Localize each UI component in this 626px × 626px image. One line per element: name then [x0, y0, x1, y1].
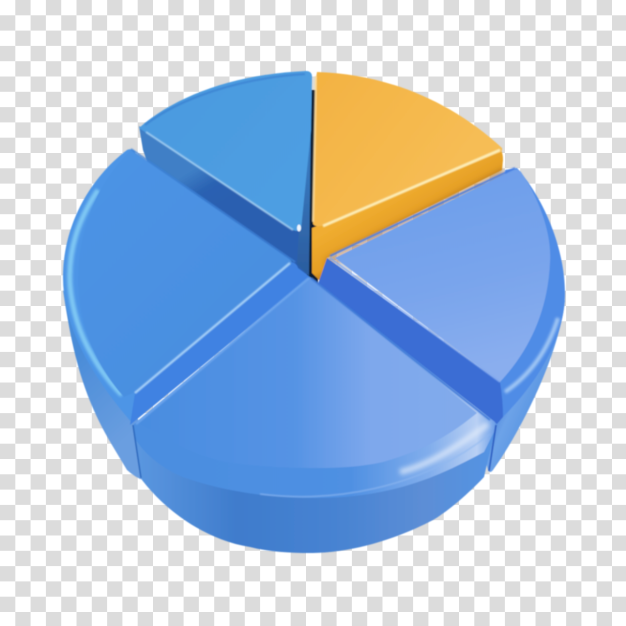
front edge highlight: [323, 150, 500, 226]
side face: [63, 290, 143, 480]
rim lower line: [260, 434, 490, 497]
rim highlight: [145, 74, 305, 125]
slice: bottom blue: [133, 277, 496, 553]
side face: [139, 126, 308, 277]
slice: top-left blue: [139, 71, 312, 277]
right seam: [489, 425, 496, 471]
top face: [313, 72, 502, 226]
strip edge highlight: [330, 258, 500, 382]
top edge: [330, 168, 515, 256]
highlight dot: [297, 224, 301, 232]
slice: right blue: [318, 168, 565, 472]
left edge highlight: [313, 76, 316, 222]
pie chart: [63, 71, 565, 553]
rim highlight: [70, 190, 122, 395]
left edge glow: [136, 278, 309, 424]
slice: left blue: [63, 149, 310, 480]
left seam: [133, 425, 141, 478]
lower edge highlight: [146, 132, 293, 230]
right side face: [297, 110, 311, 276]
rim highlight: [505, 318, 558, 392]
dark gap between slices: [300, 90, 318, 284]
side face: [480, 300, 565, 472]
rim: [63, 149, 135, 423]
front strip: [318, 258, 503, 424]
front strip: [130, 262, 310, 425]
rim: [490, 168, 565, 417]
rim highlight: [400, 424, 488, 472]
top face: [139, 71, 312, 231]
top face: [335, 169, 550, 382]
bright inner edge: [135, 263, 290, 393]
upper edge: [131, 149, 295, 262]
top face: [138, 277, 477, 468]
shadow under right slice: [325, 167, 503, 270]
rim: [133, 277, 496, 498]
right edge: [311, 278, 490, 420]
top face: [78, 150, 292, 397]
side face: [134, 425, 496, 553]
side face: [312, 149, 503, 284]
slice: orange: [312, 72, 503, 284]
